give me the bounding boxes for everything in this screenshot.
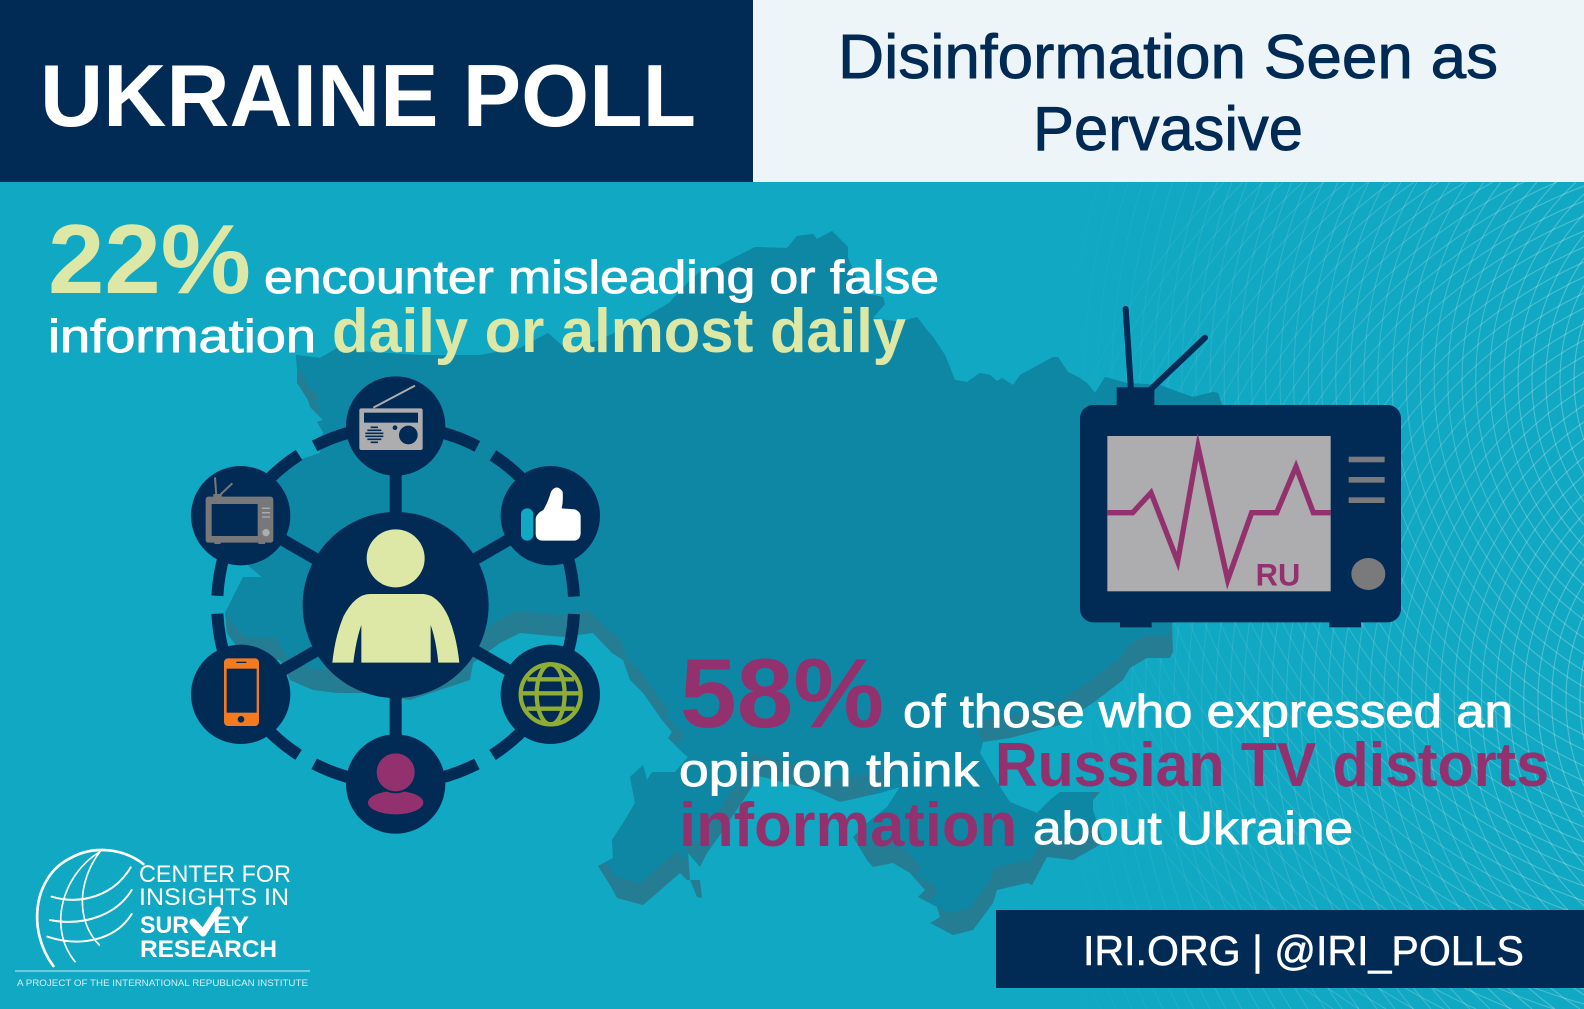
subtitle: Pervasive [1033, 95, 1303, 164]
logo text: CENTER FOR [139, 861, 291, 888]
logo text: RESEARCH [140, 936, 277, 963]
highlighted text: daily or almost daily [332, 297, 906, 366]
highlighted text: information [679, 791, 1017, 860]
signal line [1107, 447, 1331, 580]
central person icon [303, 512, 489, 698]
subtitle [838, 23, 1498, 164]
subtitle: Disinformation Seen as [838, 23, 1498, 92]
statement text: about Ukraine [1033, 802, 1353, 854]
logo text: SUR [140, 912, 189, 939]
statement text: of those who expressed an [903, 685, 1513, 737]
logo checkmark [193, 910, 218, 933]
screen label: RU [1256, 558, 1300, 593]
statement text: opinion think [679, 744, 980, 796]
icon: radio [346, 376, 445, 476]
number: 22% [48, 204, 251, 314]
statistic block: 22% [48, 204, 939, 366]
header: title panel [0, 0, 753, 182]
statement text [679, 685, 1513, 854]
highlighted text: Russian TV distorts [995, 731, 1549, 800]
title: UKRAINE POLL [40, 46, 696, 145]
statistic block: 58% [679, 638, 1549, 860]
statement text: information [48, 310, 316, 362]
large television with signal [1080, 309, 1401, 627]
logo: Center for Insights in Survey Research [15, 850, 310, 988]
logo globe [37, 850, 143, 966]
logo text: EY [213, 912, 249, 939]
network diagram [191, 376, 600, 834]
controls [1349, 457, 1385, 590]
icon: television [191, 466, 290, 565]
footer bar [996, 910, 1584, 988]
header: subtitle panel [753, 0, 1584, 182]
connecting ring and spokes [217, 426, 574, 784]
logo text: INSIGHTS IN [139, 884, 289, 911]
statement text: encounter misleading or false [264, 251, 939, 303]
antennas [1126, 309, 1205, 390]
icon: profile [346, 734, 445, 834]
icon: globe [501, 645, 600, 744]
logo tagline: A PROJECT OF THE INTERNATIONAL REPUBLICAN INSTITUTE [17, 978, 308, 988]
highlighted text [679, 731, 1549, 860]
logo text [139, 861, 291, 963]
statement text [48, 251, 939, 362]
icon: thumbs up [501, 466, 600, 565]
number: 58% [680, 638, 884, 748]
wave line pattern [1090, 182, 1584, 1009]
screen [1107, 436, 1331, 591]
icon: smartphone [191, 645, 290, 744]
map of Ukraine [222, 209, 1250, 935]
footer handle text: IRI.ORG | @IRI_POLLS [1083, 927, 1524, 974]
